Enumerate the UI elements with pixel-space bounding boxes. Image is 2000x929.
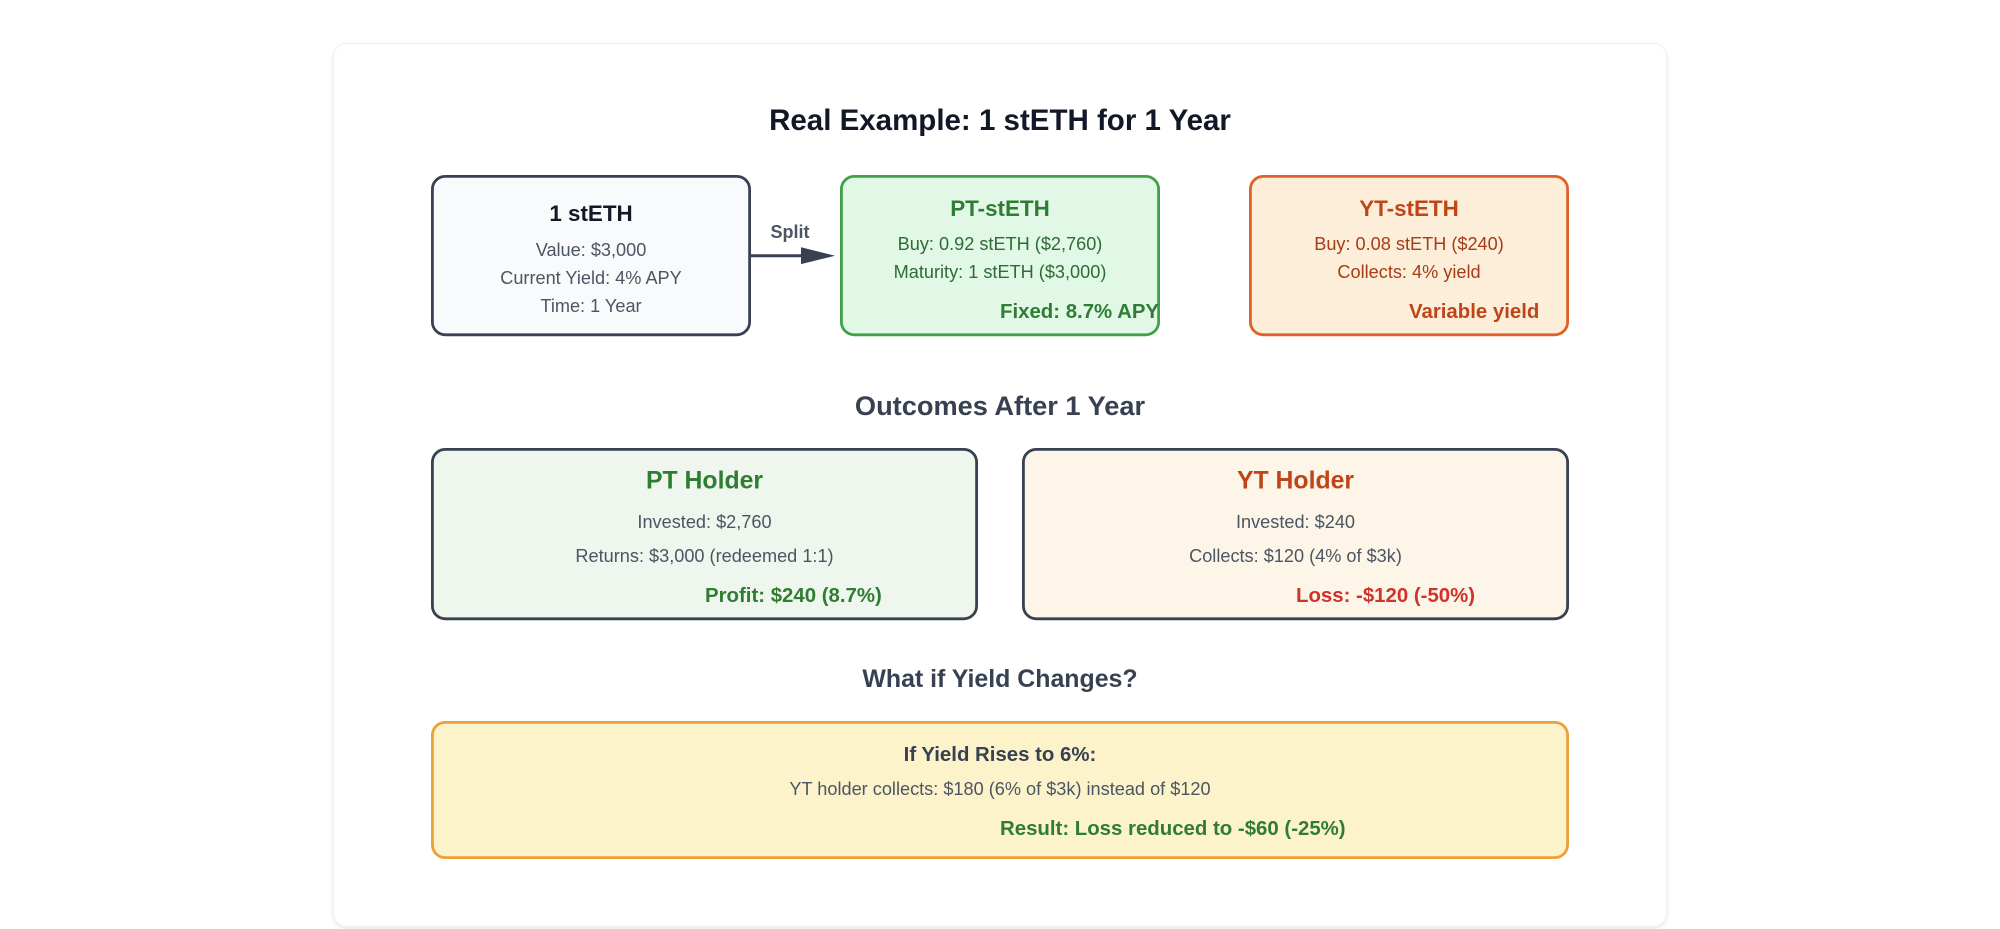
details: 1 stETH: Time: 1 Year: [540, 296, 642, 316]
box: yield scenario: [432, 722, 1568, 858]
details: yield rises: YT holder collects: $180 (6% of $3k) instead of $120: [789, 779, 1211, 799]
details: YT holder: Invested: $240: [1236, 512, 1355, 532]
panel: PT holder: [432, 449, 977, 619]
heading: PT holder: PT Holder: [646, 468, 763, 494]
details: PT holder: Returns: $3,000 (redeemed 1:1): [575, 546, 834, 566]
panel: yield scenario: [432, 722, 1568, 858]
arrow shaft: [751, 254, 805, 257]
details: YT-stETH: [1314, 234, 1504, 282]
heading: YT holder: YT Holder: [1237, 468, 1354, 494]
panel: YT holder: [1023, 449, 1568, 619]
heading: what if: What if Yield Changes?: [862, 665, 1138, 693]
box: YT-stETH: [1250, 176, 1568, 335]
heading: 1 stETH: 1 stETH: [549, 201, 633, 226]
panel: 1 stETH: [432, 176, 750, 335]
heading: YT-stETH: YT-stETH: [1359, 196, 1459, 221]
details: YT-stETH: Buy: 0.08 stETH ($240): [1314, 234, 1504, 254]
panel: main card: [333, 43, 1667, 927]
heading: PT-stETH: PT-stETH: [950, 196, 1050, 221]
details: PT-stETH: Maturity: 1 stETH ($3,000): [894, 262, 1106, 282]
box: PT-stETH: [841, 176, 1159, 335]
details: PT-stETH: Buy: 0.92 stETH ($2,760): [898, 234, 1102, 254]
result: profit: Profit: $240 (8.7%): [705, 585, 882, 607]
result: variable yield: Variable yield: [1409, 301, 1539, 323]
details: YT-stETH: Collects: 4% yield: [1337, 262, 1481, 282]
details: 1 stETH: Value: $3,000: [536, 240, 646, 260]
box: 1 stETH: [432, 176, 750, 335]
heading: outcomes: Outcomes After 1 Year: [855, 390, 1145, 421]
title: Real Example: 1 stETH for 1 Year: [769, 104, 1231, 137]
box: PT holder: [432, 449, 977, 619]
panel: YT-stETH: [1250, 176, 1568, 335]
details: 1 stETH: Current Yield: 4% APY: [500, 268, 682, 288]
result: loss reduced: Result: Loss reduced to -$60 (-25%): [1000, 818, 1346, 840]
details: 1 stETH: [500, 240, 682, 316]
arrow label: Split: [770, 222, 810, 242]
details: PT holder: Invested: $2,760: [637, 512, 772, 532]
details: PT-stETH: [894, 234, 1106, 282]
details: YT holder: [1189, 512, 1402, 566]
result: loss: Loss: -$120 (-50%): [1296, 585, 1475, 607]
box: YT holder: [1023, 449, 1568, 619]
result: fixed APY: Fixed: 8.7% APY: [1000, 301, 1159, 323]
panel: PT-stETH: [841, 176, 1159, 335]
arrow head: [801, 247, 835, 264]
details: PT holder: [575, 512, 834, 566]
arrow: split: [751, 222, 835, 264]
details: YT holder: Collects: $120 (4% of $3k): [1189, 546, 1402, 566]
heading: yield rises: If Yield Rises to 6%:: [904, 744, 1096, 766]
